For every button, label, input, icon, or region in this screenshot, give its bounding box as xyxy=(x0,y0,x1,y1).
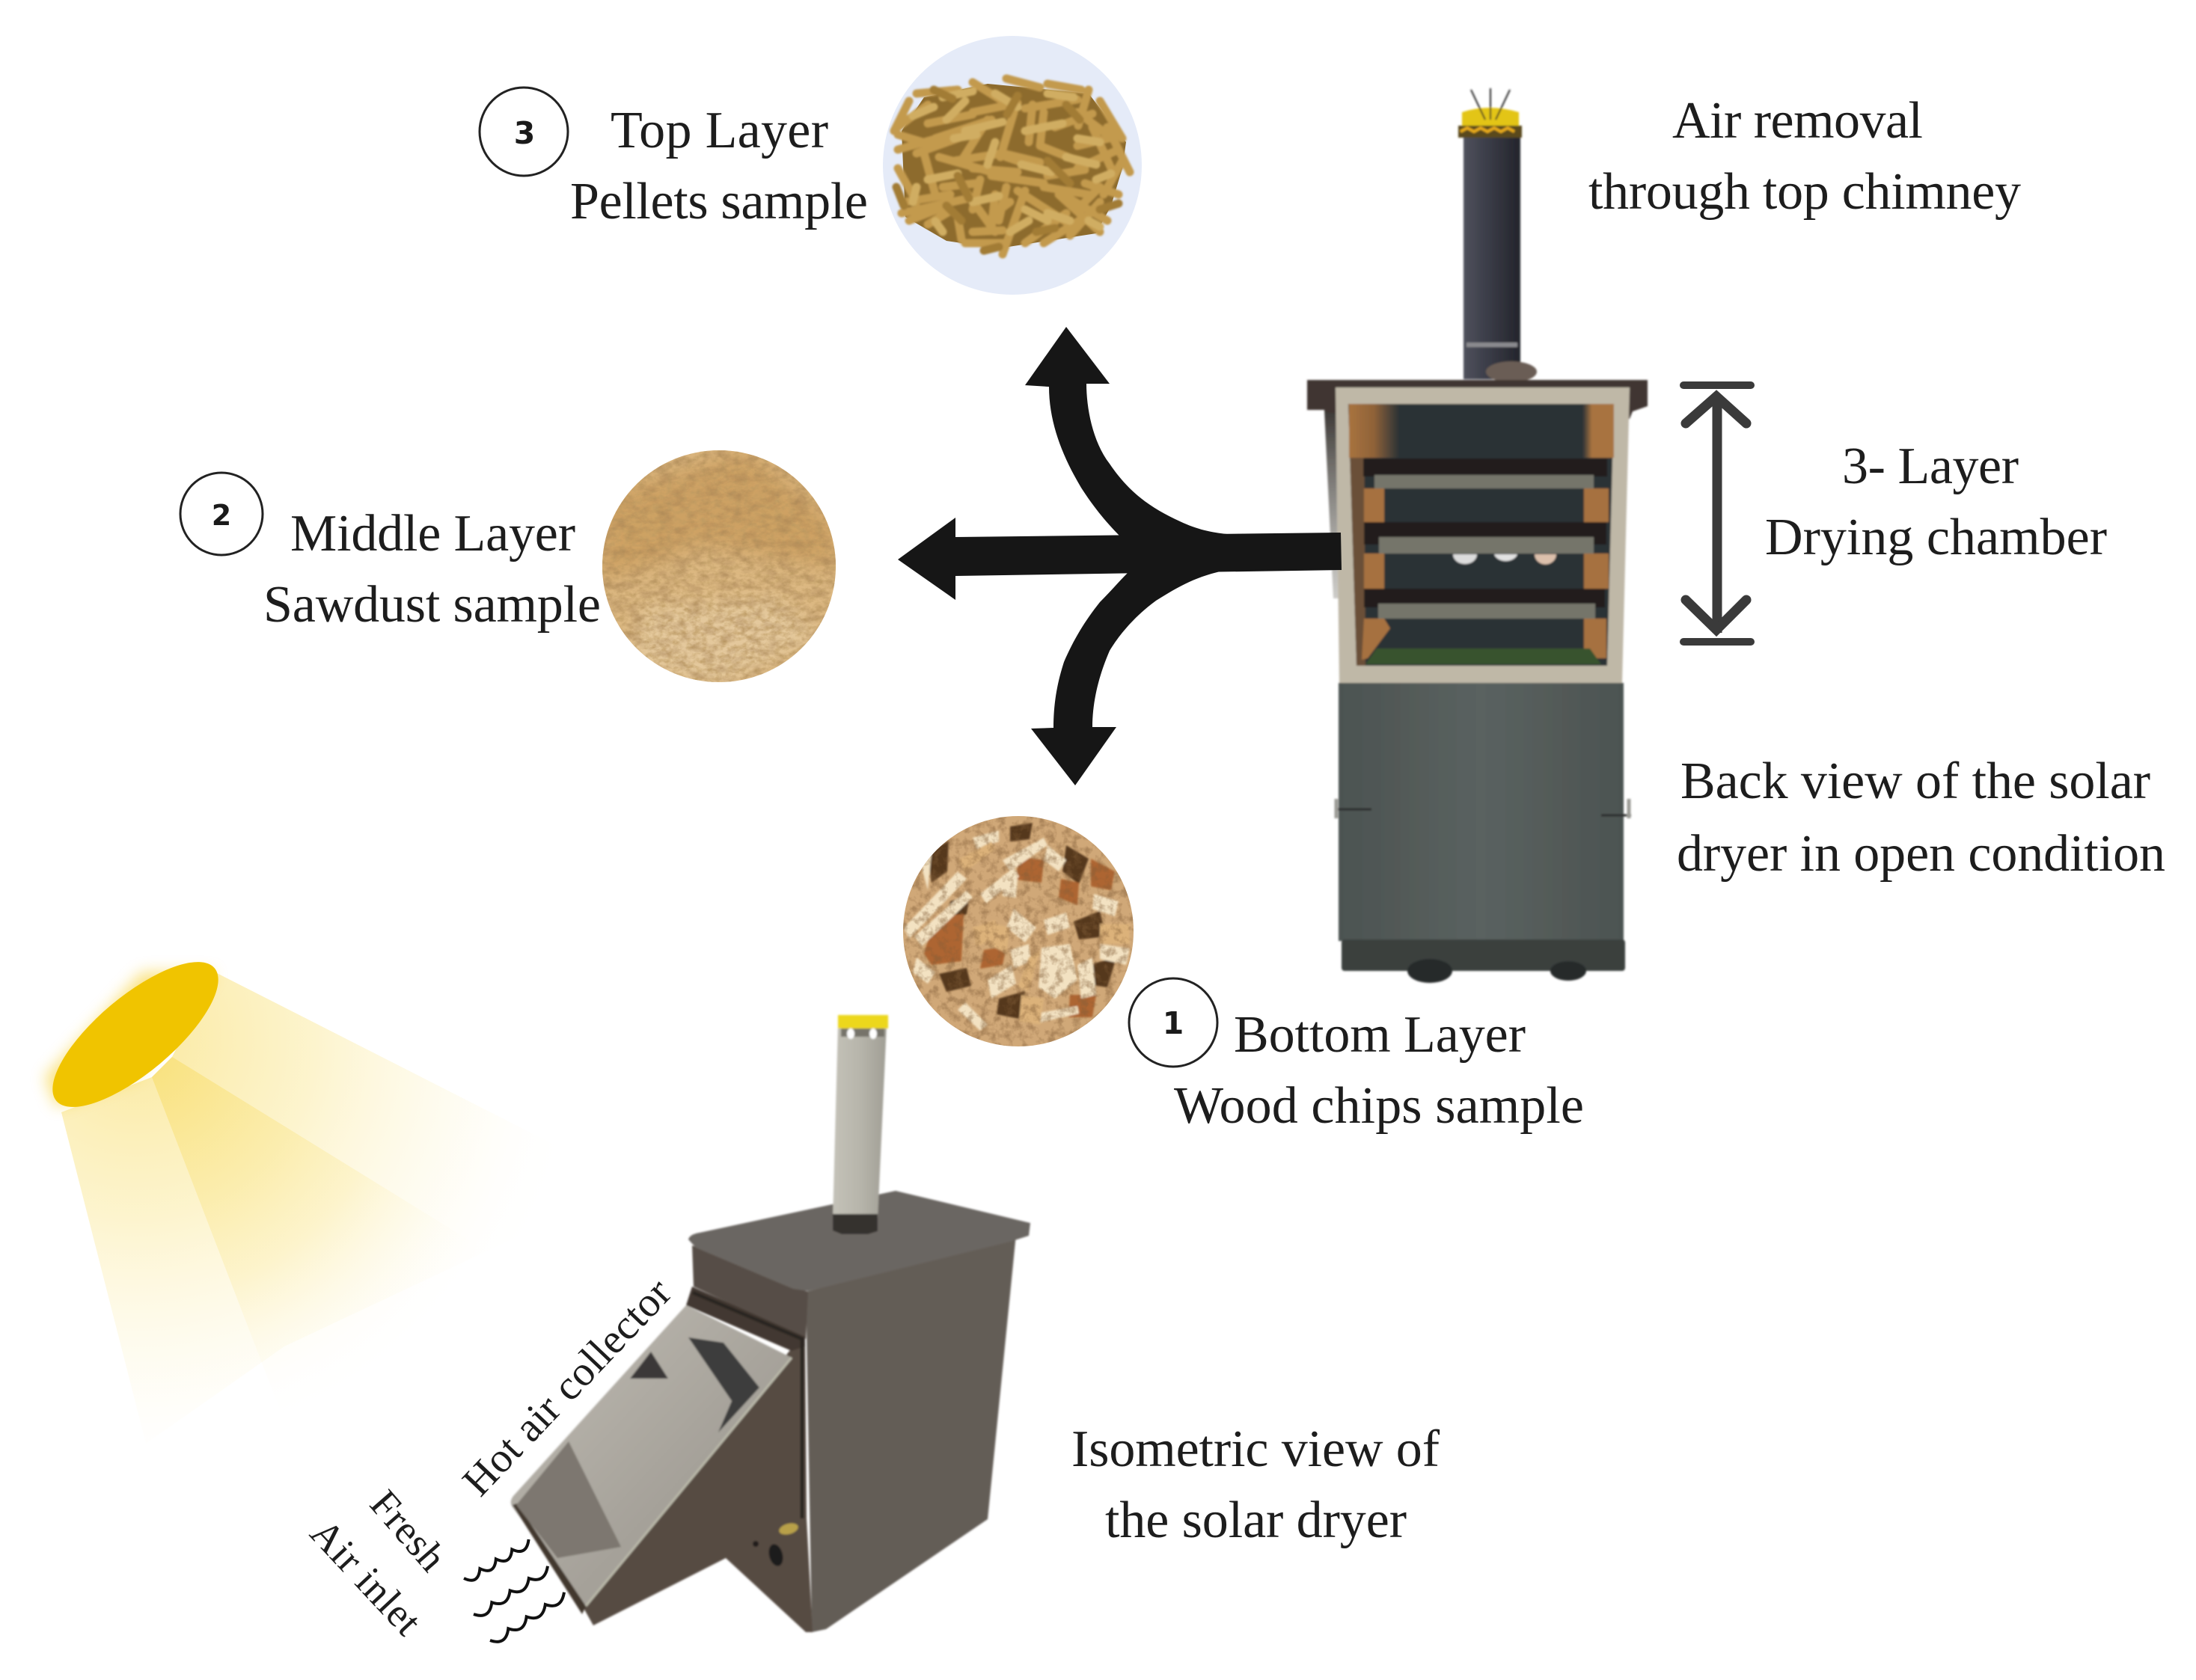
text: bottom layer wood chips sample: Wood chips sample xyxy=(1174,1077,1584,1135)
text: bottom layer wood chips sample: Bottom Layer xyxy=(1234,1006,1526,1064)
text: 3-layer drying chamber: 3- Layer xyxy=(1842,438,2019,495)
text: isometric view: the solar dryer xyxy=(1105,1492,1407,1549)
text: back view xyxy=(1677,752,2165,883)
number badge 3 xyxy=(480,88,568,176)
text: 3-layer drying chamber: Drying chamber xyxy=(1765,509,2107,566)
collector edge xyxy=(513,1503,586,1614)
door seam and latches xyxy=(1336,809,1631,815)
text: 3-layer drying chamber xyxy=(1765,438,2107,566)
text: isometric view: Isometric view of xyxy=(1071,1420,1440,1478)
text: back view: Back view of the solar xyxy=(1680,752,2150,810)
fresh air waves xyxy=(464,1539,568,1646)
label: hot air collector: Hot air collector xyxy=(453,1269,681,1505)
base xyxy=(1342,939,1625,971)
tan chips xyxy=(958,841,1130,1025)
arrow: middle layer xyxy=(898,518,1342,600)
shelves xyxy=(1374,475,1595,619)
left column xyxy=(1348,404,1365,666)
shelf rails xyxy=(1363,459,1607,607)
middle layer sawdust sample xyxy=(599,449,838,688)
top layer pellets sample xyxy=(883,36,1142,295)
pale chips xyxy=(904,830,1130,1031)
text: top layer pellets sample: Top Layer xyxy=(611,102,828,159)
bottom layer wood chips sample xyxy=(902,815,1135,1049)
top plate xyxy=(1307,380,1648,419)
text: middle layer sawdust sample: Sawdust sample xyxy=(263,576,601,634)
text: middle layer sawdust sample xyxy=(263,505,601,634)
number badge 2: 2 xyxy=(212,499,231,532)
number badge 1 xyxy=(1129,978,1217,1067)
text: air removal through top chimney: through top chimney xyxy=(1588,163,2021,221)
number badge 1: 1 xyxy=(1163,1005,1184,1041)
dryer right face xyxy=(806,1234,1016,1632)
text: back view: dryer in open condition xyxy=(1677,825,2165,883)
inlet port xyxy=(766,1542,786,1568)
chamber floor xyxy=(1365,649,1601,664)
chamber interior xyxy=(1348,404,1614,666)
lower door panel xyxy=(1339,683,1624,941)
collector glass xyxy=(511,1305,792,1606)
text: air removal through top chimney: Air removal xyxy=(1672,92,1923,150)
text: top layer pellets sample xyxy=(570,102,868,230)
feet xyxy=(1407,959,1452,983)
text: top layer pellets sample: Pellets sample xyxy=(570,173,868,230)
label: air inlet: Air inlet xyxy=(302,1510,430,1644)
brown chips xyxy=(924,856,1115,1017)
dryer upper left face xyxy=(692,1245,808,1339)
isometric chimney xyxy=(833,1015,888,1234)
double arrow: chamber height xyxy=(1683,385,1751,642)
isometric view of the solar dryer xyxy=(511,1015,1030,1632)
collector side and lower body xyxy=(584,1339,813,1632)
flow arrows to the three layers xyxy=(898,327,1342,785)
text: bottom layer wood chips sample xyxy=(1174,1006,1584,1135)
back chimney xyxy=(1458,88,1537,382)
arrow: bottom layer xyxy=(1031,570,1227,785)
text: middle layer sawdust sample: Middle Layer xyxy=(290,505,575,562)
dryer lid xyxy=(688,1191,1030,1291)
back view of the solar dryer xyxy=(1307,88,1648,983)
sun with light beams xyxy=(32,939,569,1444)
number badge 3: 3 xyxy=(514,115,535,151)
lamps xyxy=(1453,554,1556,564)
body left edge xyxy=(1324,410,1341,598)
text: isometric view xyxy=(1071,1420,1440,1549)
number badge 2 xyxy=(180,473,263,555)
wood posts xyxy=(1349,404,1614,660)
glass reflections xyxy=(516,1337,759,1558)
text: air removal through top chimney xyxy=(1588,92,2021,221)
cream frame of drying chamber xyxy=(1336,387,1630,683)
dark gaps xyxy=(928,823,1116,1019)
arrow: top layer xyxy=(1025,327,1227,539)
label: fresh: Fresh xyxy=(361,1482,455,1580)
collector back strip xyxy=(686,1287,805,1351)
